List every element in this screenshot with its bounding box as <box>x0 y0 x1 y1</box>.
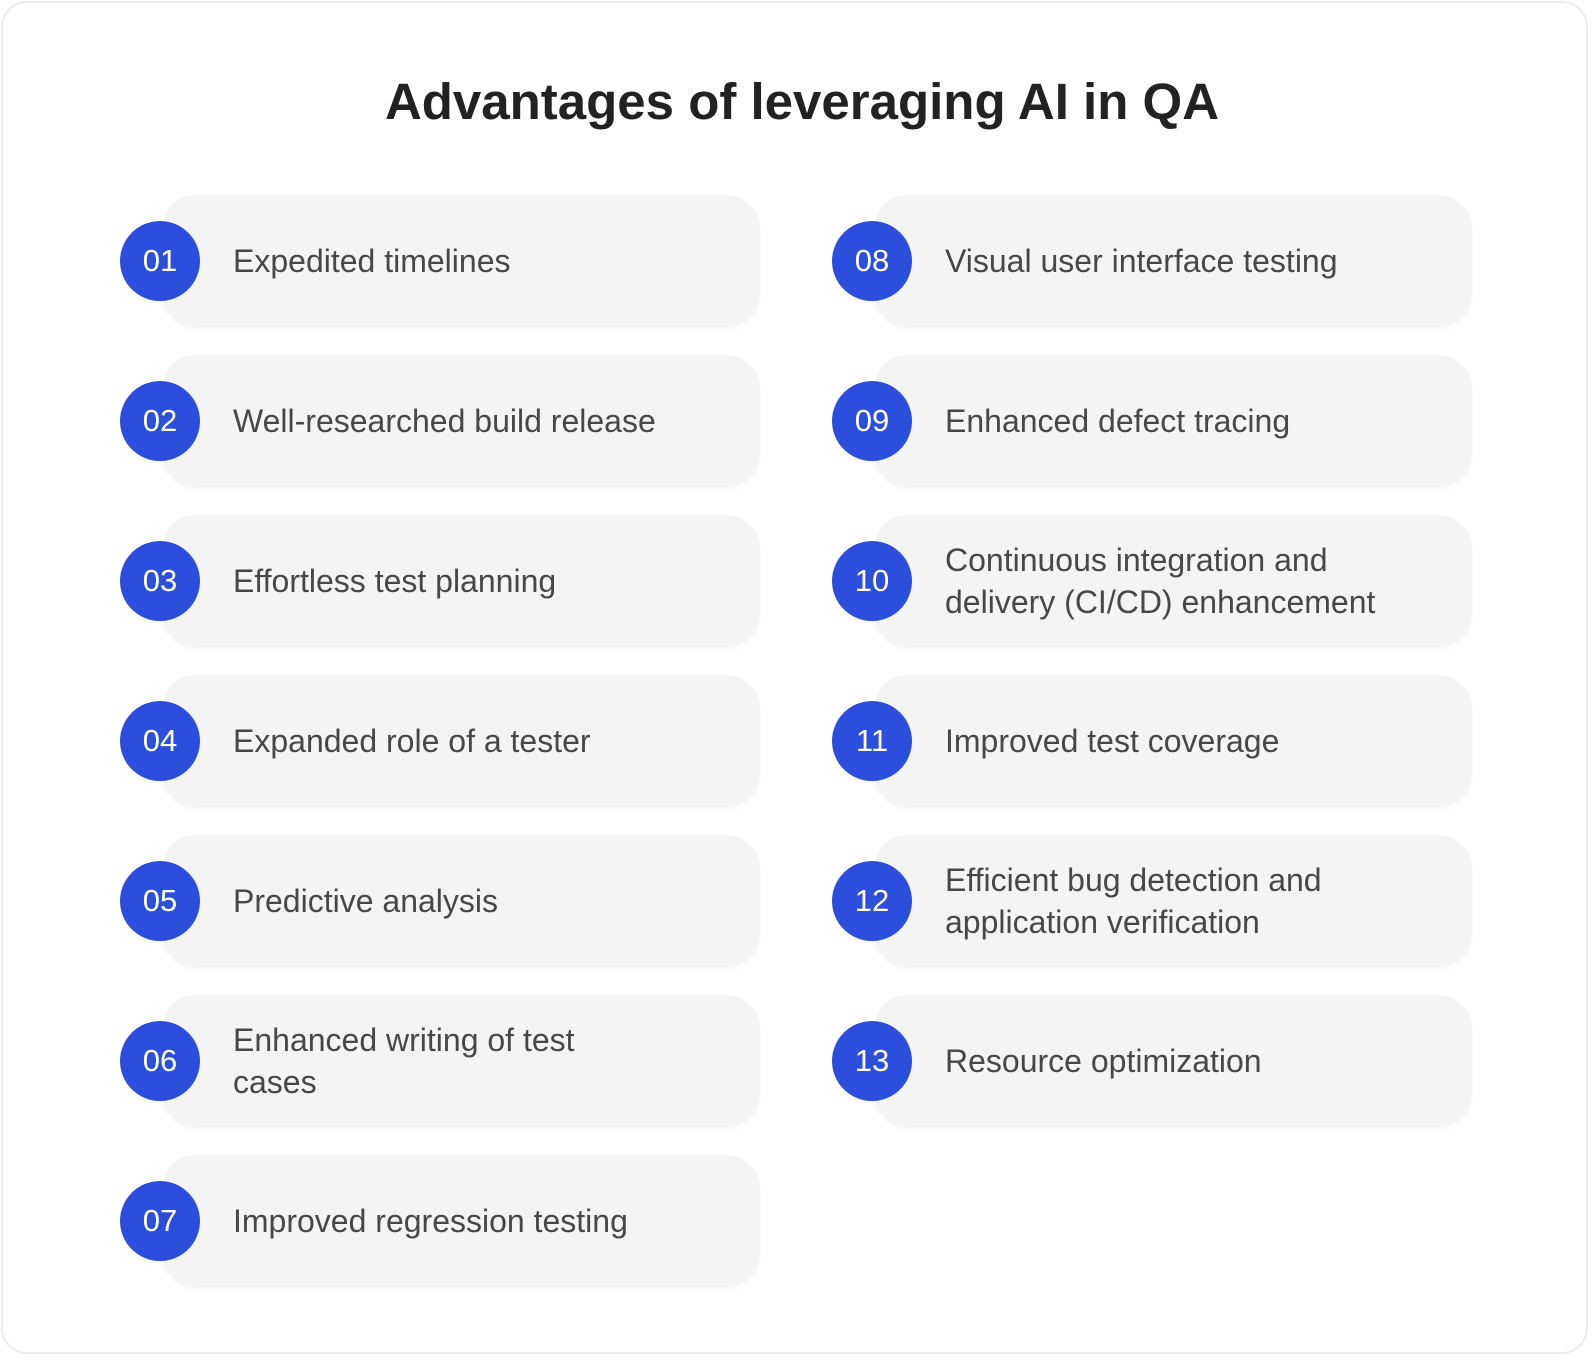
item 04: Expanded role of a tester <box>233 723 591 759</box>
item 05: Predictive analysis <box>233 883 498 919</box>
item 10: 10 <box>855 563 889 598</box>
item 12: Efficient bug detection and <box>945 862 1322 898</box>
item 05: 05 <box>143 883 177 918</box>
item 10: delivery (CI/CD) enhancement <box>945 584 1375 620</box>
item 13: Resource optimization <box>945 1043 1262 1079</box>
item 01: Expedited timelines <box>233 243 510 279</box>
item 11: Improved test coverage <box>945 723 1279 759</box>
item 09: Enhanced defect tracing <box>945 403 1290 439</box>
item 07: 07 <box>143 1203 177 1238</box>
item 06 <box>120 995 760 1127</box>
item 04: 04 <box>143 723 177 758</box>
title: Advantages of leveraging AI in QA <box>385 73 1219 130</box>
item 03 <box>120 515 760 647</box>
item 09 <box>832 355 1472 487</box>
item 03: 03 <box>143 563 177 598</box>
item 06: Enhanced writing of test cases <box>233 1022 575 1100</box>
item 12: 12 <box>855 883 889 918</box>
item 07 <box>120 1155 760 1287</box>
item 10: Continuous integration and <box>945 542 1328 578</box>
item 05 <box>120 835 760 967</box>
item 12: application verification <box>945 904 1260 940</box>
item 01: 01 <box>143 243 177 278</box>
item 11 <box>832 675 1472 807</box>
item 04 <box>120 675 760 807</box>
item 02: 02 <box>143 403 177 438</box>
item 12 <box>832 835 1472 967</box>
item 13 <box>832 995 1472 1127</box>
item 13: 13 <box>855 1043 889 1078</box>
item 09: 09 <box>855 403 889 438</box>
item 02: Well-researched build release <box>233 403 656 439</box>
item 08: 08 <box>855 243 889 278</box>
item 10 <box>832 515 1472 647</box>
item 07: Improved regression testing <box>233 1203 628 1239</box>
item 01 <box>120 195 760 327</box>
item 08 <box>832 195 1472 327</box>
item 02 <box>120 355 760 487</box>
item 11: 11 <box>856 723 888 758</box>
item 08: Visual user interface testing <box>945 243 1338 279</box>
item 03: Effortless test planning <box>233 563 556 599</box>
item 06: 06 <box>143 1043 177 1078</box>
